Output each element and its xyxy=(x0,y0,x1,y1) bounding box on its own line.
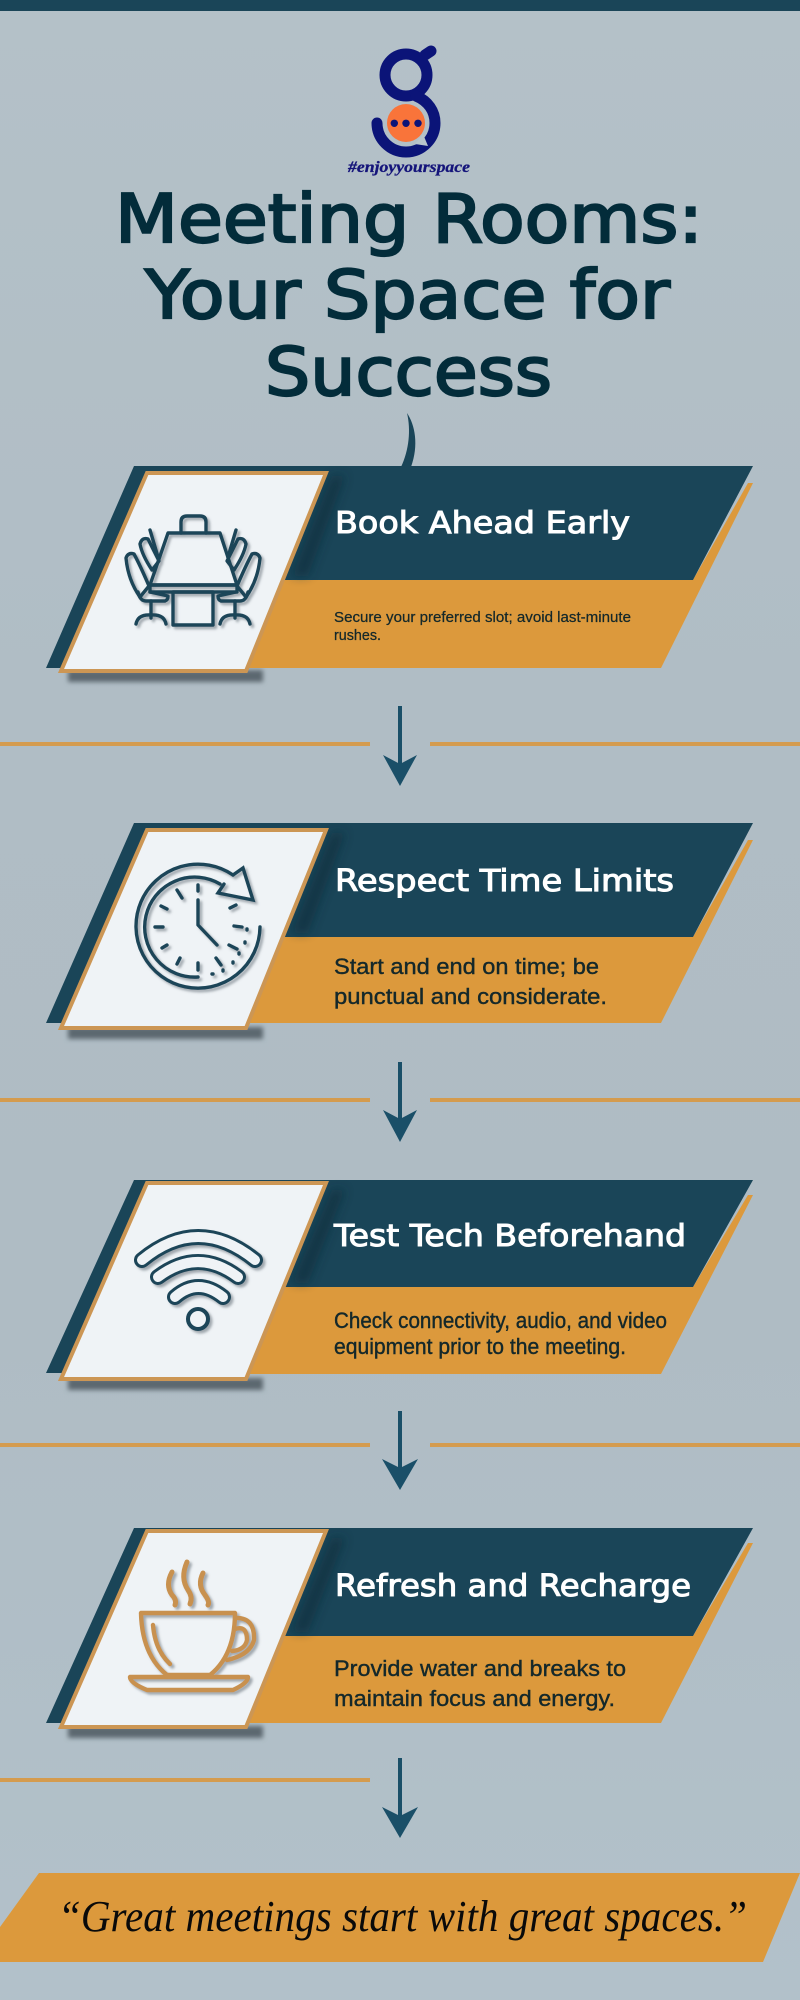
title xyxy=(115,180,703,411)
divider with arrow 4 xyxy=(0,1758,418,1838)
icon: coffee cup xyxy=(130,1562,254,1690)
description: Provide water and breaks to xyxy=(334,1656,626,1681)
description: Start and end on time; be xyxy=(334,954,599,979)
dark band xyxy=(46,823,753,1023)
heading: Test Tech Beforehand xyxy=(333,1219,686,1254)
divider with arrow 2 xyxy=(0,1062,800,1142)
description: Secure your preferred slot; avoid last-minute xyxy=(334,610,631,626)
dark band xyxy=(46,466,753,668)
description: maintain focus and energy. xyxy=(334,1686,615,1711)
orange band xyxy=(230,1543,753,1723)
title: Meeting Rooms: xyxy=(115,180,703,258)
panel: book ahead early xyxy=(46,466,753,682)
icon: wifi xyxy=(142,1237,255,1329)
orange band xyxy=(230,1195,753,1374)
description: Check connectivity, audio, and video xyxy=(334,1308,667,1333)
image card xyxy=(61,830,326,1028)
band shadow xyxy=(292,476,345,576)
card shadow xyxy=(68,1726,263,1738)
image card xyxy=(61,1183,326,1379)
divider with arrow 3 xyxy=(0,1411,800,1490)
card shadow xyxy=(68,670,263,682)
heading: Respect Time Limits xyxy=(335,864,674,899)
band shadow xyxy=(292,1190,345,1283)
heading: Refresh and Recharge xyxy=(335,1569,691,1604)
description: rushes. xyxy=(334,628,381,644)
quote banner xyxy=(0,1873,800,1962)
top bar xyxy=(0,0,800,11)
quote text: “Great meetings start with great spaces.” xyxy=(58,1892,747,1941)
orange band xyxy=(230,840,753,1023)
image card xyxy=(61,473,326,671)
panel: refresh and recharge xyxy=(46,1528,753,1738)
logo speech bubble xyxy=(387,104,428,146)
description: punctual and considerate. xyxy=(334,984,607,1009)
orange band xyxy=(230,483,753,668)
image card xyxy=(61,1531,326,1727)
title: Your Space for xyxy=(144,256,670,334)
dark band xyxy=(46,1528,753,1723)
description: equipment prior to the meeting. xyxy=(334,1334,626,1359)
band shadow xyxy=(292,833,345,933)
card shadow xyxy=(68,1378,263,1390)
description xyxy=(334,954,607,1009)
icon: conference table xyxy=(126,516,260,625)
dark band xyxy=(46,1180,753,1373)
logo hashtag: #enjoyyourspace xyxy=(347,159,470,176)
panel: test tech beforehand xyxy=(46,1180,753,1390)
card shadow xyxy=(68,1027,263,1039)
band shadow xyxy=(292,1538,345,1632)
panel: respect time limits xyxy=(46,823,753,1039)
logo mark: g letter xyxy=(377,51,435,152)
icon: clock xyxy=(136,864,260,988)
divider with arrow 1 xyxy=(0,706,800,786)
description xyxy=(334,610,631,644)
title: Success xyxy=(265,333,552,411)
connector hook xyxy=(401,413,415,467)
description xyxy=(334,1656,626,1711)
logo xyxy=(347,51,470,176)
heading: Book Ahead Early xyxy=(335,506,630,541)
description xyxy=(334,1308,667,1359)
